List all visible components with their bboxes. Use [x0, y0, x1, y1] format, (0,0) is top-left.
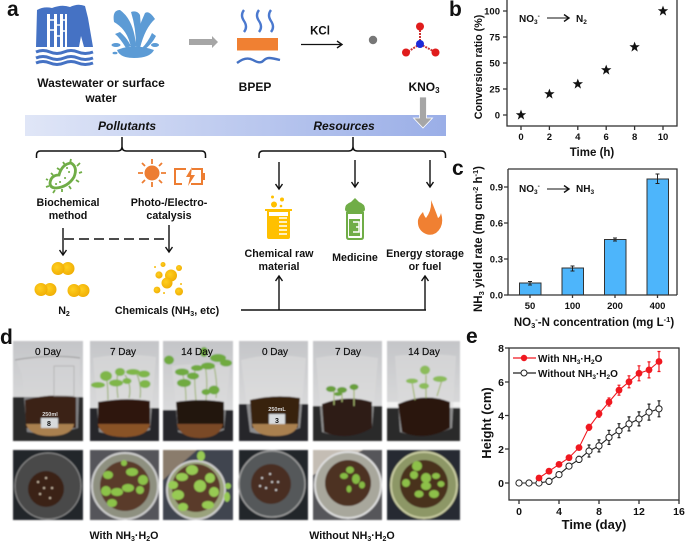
arrow: gray to BPEP	[189, 36, 218, 48]
y tick labels: 2	[498, 444, 504, 456]
legend: O	[610, 369, 618, 380]
label: without NH3 H2O: 3	[367, 536, 371, 543]
series: with NH3 H2O	[536, 352, 662, 481]
x tick labels: 100	[565, 301, 580, 312]
photo: without NH3 14 day top	[387, 450, 460, 520]
arrow: KNO3 to resources	[414, 97, 432, 128]
axis titles: Height (cm)	[479, 387, 494, 459]
reaction label: -	[538, 183, 540, 190]
photo: without NH3 0 day side: 0 Day	[262, 347, 288, 358]
x tick labels: 4	[556, 506, 562, 518]
y tick labels: 0	[495, 110, 500, 122]
x tick labels: 400	[650, 301, 665, 312]
photo: without NH3 7 day top	[313, 450, 382, 520]
label: N2: N	[58, 305, 66, 317]
photo: without NH3 14 day side: 14 Day	[408, 347, 440, 358]
x tick labels	[525, 301, 665, 312]
arrow: catalysis to chemicals	[168, 225, 170, 252]
legend: 2	[607, 374, 611, 381]
label: biochemical method: method	[49, 210, 87, 222]
label: biochemical method: Biochemical	[37, 197, 100, 209]
x tick labels: 12	[633, 506, 645, 518]
axis titles: NO	[514, 317, 531, 329]
legend: 2	[591, 359, 595, 366]
axis titles: )	[670, 317, 674, 329]
photo: with NH3 14 day top	[163, 450, 233, 520]
label: KNO3: 3	[435, 86, 440, 95]
label: BPEP: BPEP	[239, 80, 271, 94]
axis titles: 3	[531, 321, 535, 330]
label: with NH3 H2O: O	[150, 530, 158, 542]
label: without NH3 H2O: O	[386, 530, 395, 542]
arrows: resources down	[279, 160, 430, 189]
label: wastewater: Wastewater or surface	[37, 76, 165, 90]
label: chemical raw material	[245, 248, 314, 273]
panel: b conversion ratio chart	[449, 0, 677, 159]
error bars	[528, 174, 660, 285]
x tick labels: 50	[525, 301, 535, 312]
y tick labels: 75	[489, 32, 501, 44]
y tick labels	[490, 182, 503, 302]
photo: without NH3 0 day side: 3	[275, 418, 279, 425]
axis titles: )	[473, 166, 485, 170]
label: chemicals: 3	[190, 311, 194, 318]
reaction label: N	[576, 14, 583, 25]
axis titles: Time (h)	[570, 147, 614, 159]
photo: with NH3 0 day side: 8	[47, 421, 51, 428]
icon: sun	[138, 159, 166, 187]
brace: resources	[259, 137, 446, 158]
x tick labels	[516, 506, 685, 518]
reaction label: NO	[519, 14, 534, 25]
arrow: KCl reaction	[301, 44, 342, 46]
icon: BPEP heated material	[237, 10, 280, 63]
reaction label: 3	[590, 189, 594, 196]
bars	[520, 179, 668, 295]
photo: with NH3 7 day side	[90, 341, 159, 441]
icon: chemical bubbles	[154, 262, 183, 296]
label: without NH3 H2O: 2	[383, 536, 387, 543]
axis titles: -1	[664, 315, 670, 324]
label: chemicals: Chemicals (NH	[115, 305, 190, 317]
axis titles	[473, 14, 614, 159]
y tick labels: 25	[489, 84, 501, 96]
photo: with NH3 7 day top	[90, 450, 159, 520]
reaction label: 3	[534, 19, 538, 26]
legend: 3	[577, 359, 581, 366]
photo: with NH3 0 day side: 0 Day	[35, 347, 61, 358]
axis titles	[471, 166, 674, 330]
panel letter d: d	[0, 326, 13, 349]
y tick labels: 4	[498, 410, 504, 422]
legend: Without NH	[538, 369, 592, 380]
x tick labels: 2	[547, 132, 552, 143]
photo: without NH3 0 day top	[239, 450, 308, 520]
axis titles: Time (day)	[562, 517, 626, 532]
brace: pollutants	[36, 137, 206, 158]
x tick labels: 16	[673, 506, 685, 518]
legend: With NH	[538, 354, 577, 365]
star data points	[516, 6, 668, 120]
photo: without NH3 0 day side: 250mL	[268, 407, 286, 413]
label: wastewater: water	[84, 91, 117, 105]
x tick labels: 6	[604, 132, 609, 143]
x tick labels	[518, 132, 668, 143]
label: N2: 2	[66, 311, 70, 318]
label: with NH3 H2O: ·H	[135, 530, 146, 542]
icon: flame	[418, 200, 442, 235]
label: chemical raw material: Chemical raw	[245, 248, 314, 260]
y tick labels: 0.6	[490, 218, 503, 230]
x tick labels: 4	[575, 132, 581, 143]
photo: without NH3 7 day side	[313, 341, 382, 441]
legend: ·H	[596, 369, 607, 380]
photo: with NH3 0 day side	[13, 341, 83, 441]
icon: waterfall	[36, 5, 93, 64]
y tick labels: 0.0	[490, 290, 503, 302]
icon: potassium atom	[369, 36, 377, 44]
axis titles: h	[473, 177, 485, 187]
x tick labels: 200	[607, 301, 623, 312]
legend: 3	[592, 374, 596, 381]
axis titles	[479, 387, 626, 532]
x tick labels: 0	[516, 506, 522, 518]
axis titles: NH	[473, 295, 485, 312]
reaction label	[519, 183, 594, 196]
reaction label: 3	[534, 189, 538, 196]
label: KNO3: KNO	[408, 80, 435, 94]
panel: c NH3 yield bar chart	[452, 157, 677, 330]
icon: beaker	[265, 196, 292, 239]
arrow: biochemical to N2	[62, 228, 64, 255]
photo: without NH3 14 day side	[387, 341, 460, 441]
plot frame and ticks	[503, 0, 677, 130]
x tick labels: 10	[658, 132, 668, 143]
y tick labels: 6	[498, 377, 504, 389]
icon: medicine bottle	[345, 198, 365, 239]
label: without NH3 H2O: Without NH	[309, 530, 367, 542]
reaction label: NO	[519, 184, 534, 195]
label: medicine: Medicine	[332, 252, 378, 264]
x tick labels: 8	[632, 132, 637, 143]
reaction label: NH	[576, 184, 590, 195]
plot frame and ticks	[504, 169, 677, 298]
photo: without NH3 0 day side	[239, 341, 308, 441]
axis titles: -	[535, 315, 538, 324]
label: photo electro catalysis	[131, 197, 208, 222]
y tick labels	[484, 6, 501, 122]
x tick labels: 8	[596, 506, 602, 518]
y tick labels: 50	[489, 58, 500, 70]
axis titles: -2	[471, 187, 480, 193]
label: energy storage: Energy storage	[386, 248, 464, 260]
y tick labels	[498, 343, 504, 490]
panel: d plant photographs	[0, 326, 460, 543]
reaction label	[519, 13, 587, 26]
panel: a schematic	[7, 0, 464, 318]
label: chemical raw material: material	[258, 261, 300, 273]
axis titles: yield rate (mg cm	[473, 193, 485, 291]
y tick labels: 8	[498, 343, 504, 355]
legend: O	[595, 354, 603, 365]
photo: with NH3 7 day side: 7 Day	[110, 347, 136, 358]
legend: ·H	[580, 354, 591, 365]
photo: with NH3 0 day top	[13, 450, 83, 520]
panel: e height line chart	[466, 325, 685, 532]
photo: with NH3 14 day side: 14 Day	[181, 347, 213, 358]
reaction label: -	[538, 13, 540, 20]
label: KCl: KCl	[310, 26, 330, 38]
x tick labels: 0	[518, 132, 524, 143]
label: without NH3 H2O: ·H	[371, 530, 383, 542]
label: chemicals: , etc)	[194, 305, 220, 317]
y tick labels: 100	[484, 6, 500, 18]
y tick labels: 0.3	[490, 254, 503, 266]
axis titles: 3	[477, 291, 486, 295]
label: photo electro catalysis: catalysis	[146, 210, 192, 222]
photo: with NH3 14 day side	[163, 341, 233, 441]
icon: N2 molecules	[34, 262, 90, 297]
label: wastewater	[37, 76, 165, 105]
label: with NH3 H2O: 3	[131, 536, 135, 543]
reaction label: 2	[583, 19, 587, 26]
icon: bacterium	[46, 159, 82, 193]
panel letter c: c	[452, 157, 464, 180]
icon: nitrate molecule	[402, 22, 440, 56]
panel letter e: e	[466, 325, 478, 348]
axis titles: Conversion ratio (%)	[473, 14, 485, 119]
dashed link	[64, 238, 168, 240]
y tick labels: 0.9	[490, 182, 503, 194]
plot frame and ticks	[505, 348, 679, 504]
label: with NH3 H2O: With NH	[90, 530, 131, 542]
axis titles: -N concentration (mg L	[538, 317, 664, 329]
axis titles: -1	[471, 170, 480, 177]
y tick labels: 0	[498, 478, 504, 490]
banner: pollutants and resources	[25, 115, 446, 136]
photo: with NH3 0 day side: 250ml	[42, 412, 58, 418]
banner: pollutants and resources: Pollutants	[98, 119, 156, 133]
label: biochemical method	[37, 197, 100, 222]
icon: water fountain	[112, 10, 159, 58]
legend	[513, 354, 618, 381]
label: energy storage	[386, 248, 464, 273]
photo: without NH3 7 day side: 7 Day	[335, 347, 361, 358]
series: without NH3 H2O	[516, 401, 662, 486]
label: with NH3 H2O: 2	[146, 536, 150, 543]
banner: pollutants and resources: Resources	[313, 119, 375, 133]
label: energy storage: or fuel	[409, 261, 441, 273]
label: photo electro catalysis: Photo-/Electro-	[131, 197, 208, 209]
arrows: chemicals to resources	[241, 276, 426, 310]
icon: battery	[175, 167, 205, 186]
